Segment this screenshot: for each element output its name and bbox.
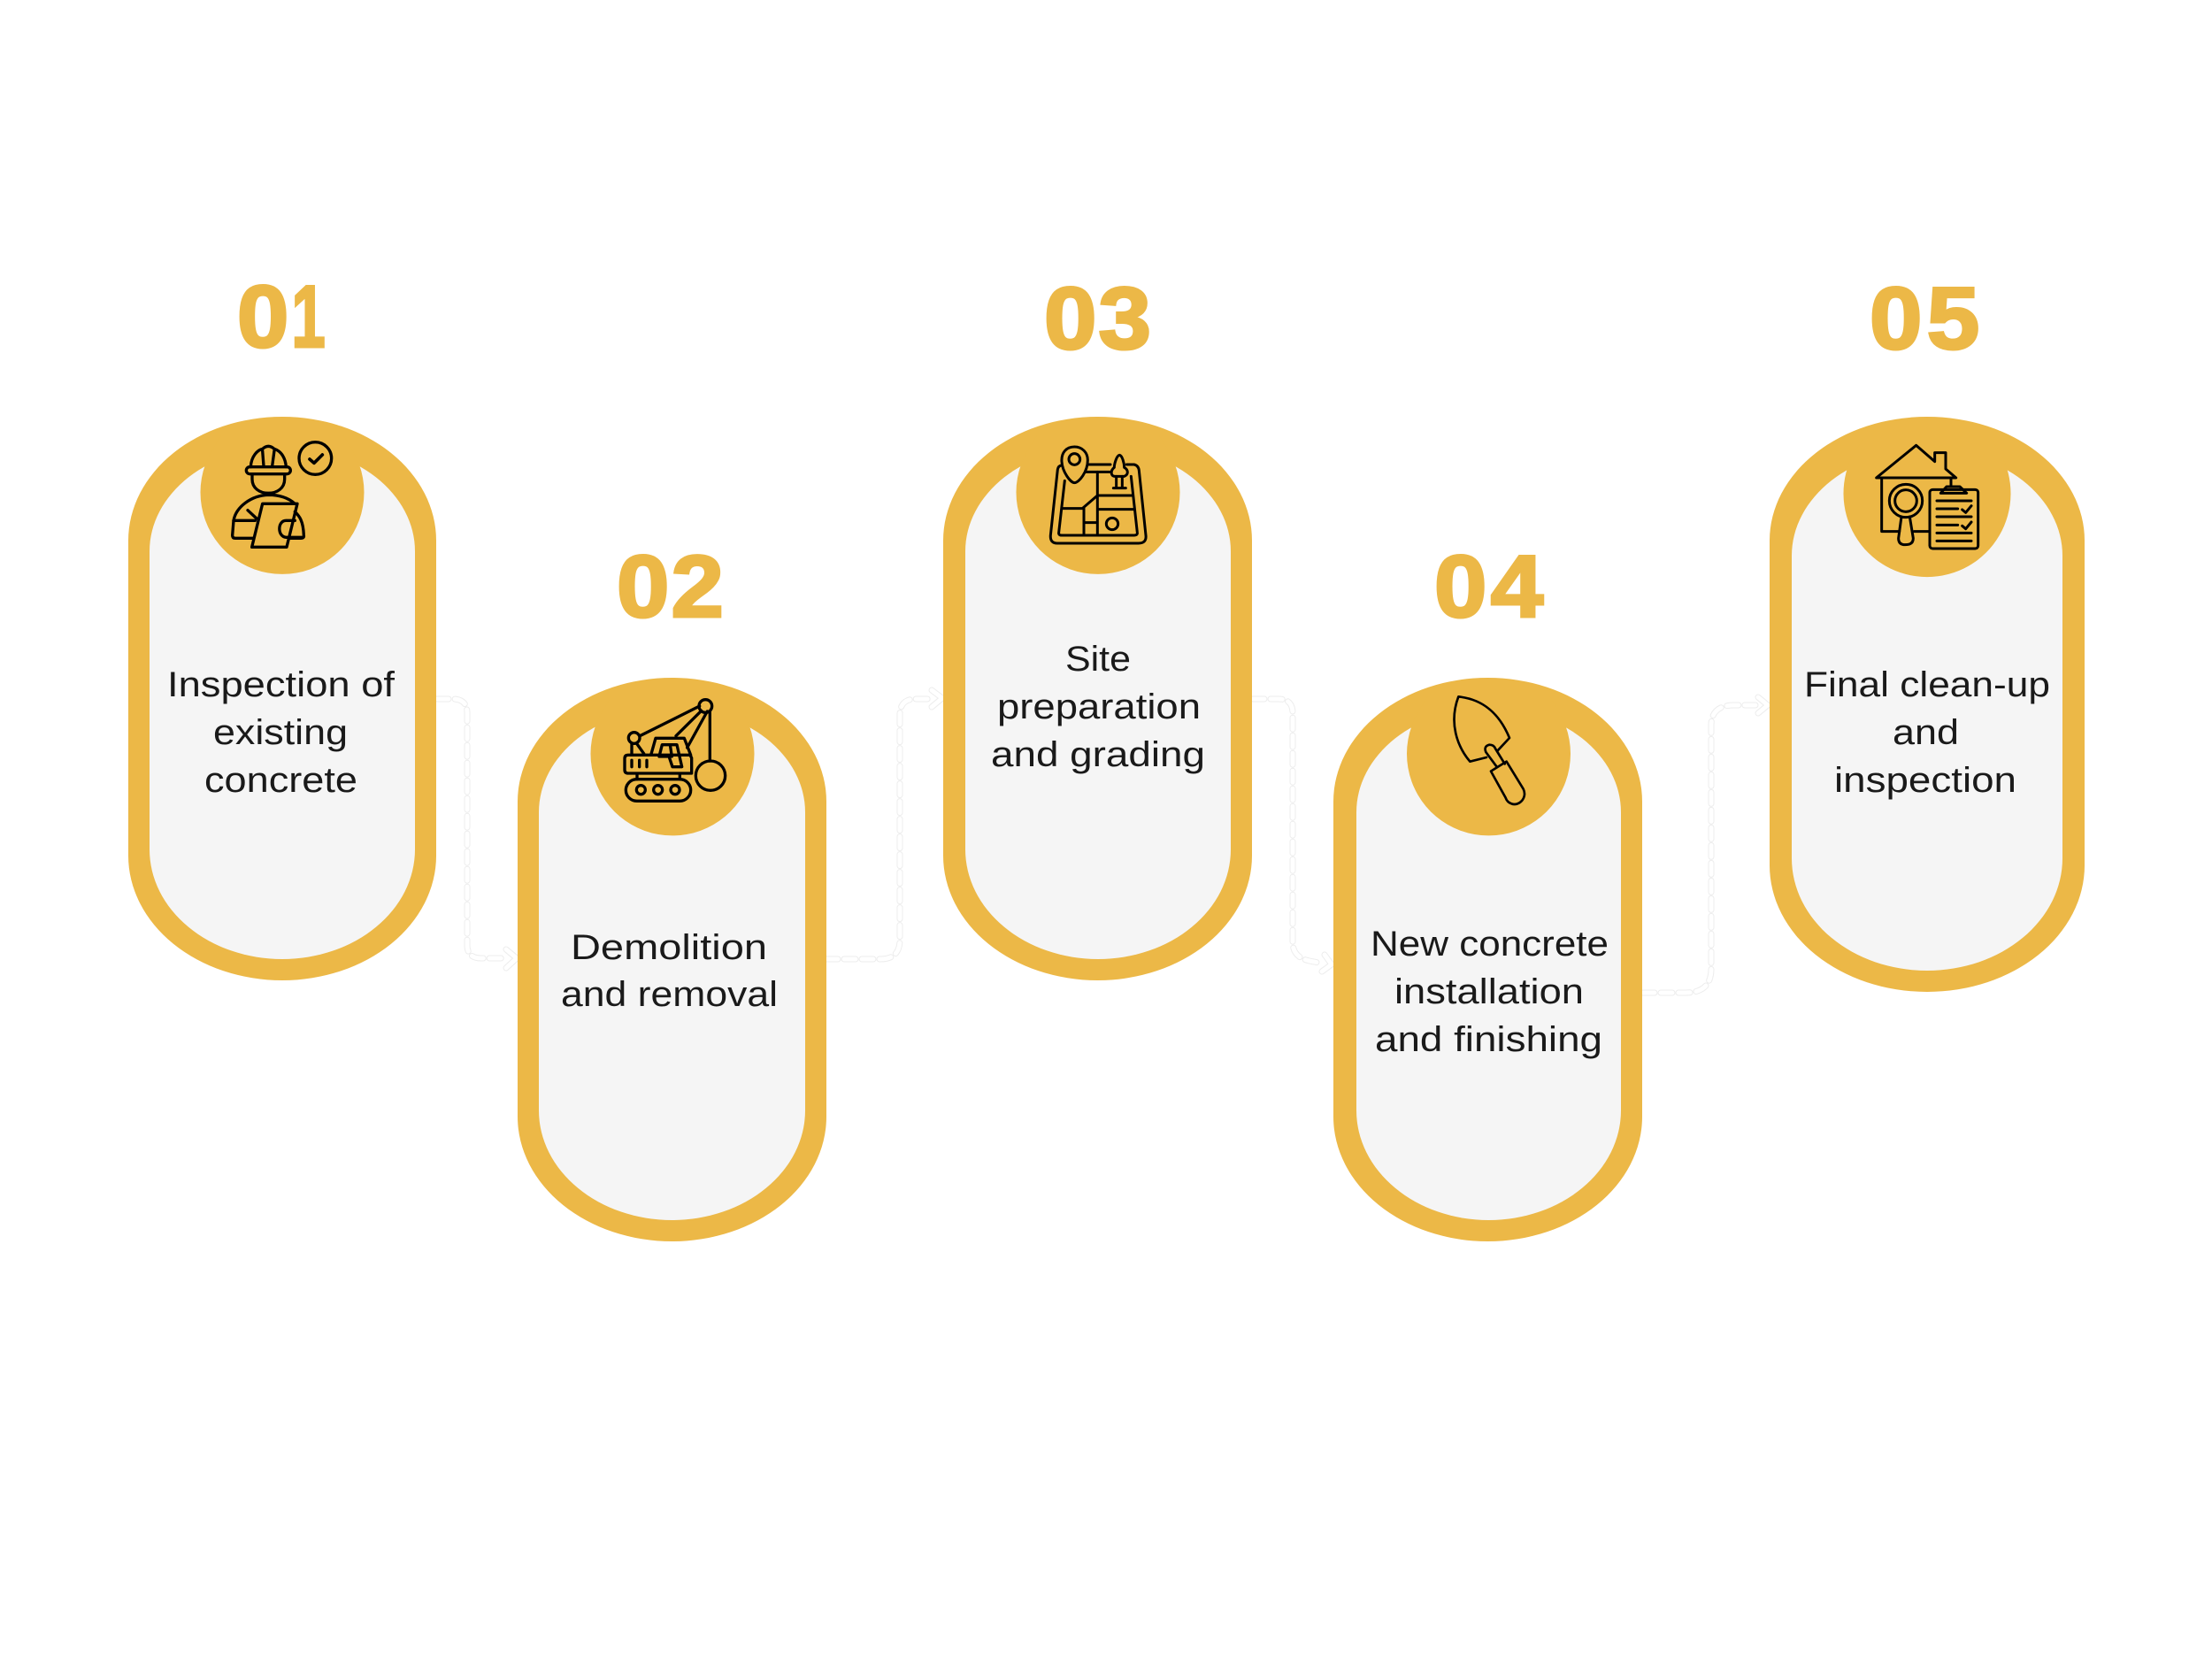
step text xyxy=(167,665,396,800)
step text: preparation xyxy=(997,687,1201,726)
step text: Demolition xyxy=(571,928,767,967)
step number 04: 04 xyxy=(1434,538,1543,635)
step text xyxy=(1804,665,2050,800)
step text: Inspection of xyxy=(167,665,396,704)
icon: trowel xyxy=(1455,696,1525,804)
step text: and xyxy=(1893,713,1959,752)
step text: and removal xyxy=(561,975,778,1014)
step number 05: 05 xyxy=(1870,270,1979,367)
panel: step 1 xyxy=(128,268,436,980)
arrow: step 2 to step 3 xyxy=(826,690,942,959)
icon badge xyxy=(1016,435,1180,574)
step text: and grading xyxy=(991,735,1205,774)
panel: step 3 xyxy=(943,270,1252,980)
step text: existing xyxy=(213,713,348,752)
step number 01: 0 xyxy=(237,268,288,365)
icon: demolition crane xyxy=(625,700,726,801)
step text xyxy=(991,640,1205,774)
icon: inspector with clipboard xyxy=(233,442,332,547)
icon: house inspection checklist xyxy=(1877,445,1978,549)
panel: step 5 xyxy=(1770,270,2085,992)
panel: step 2 xyxy=(518,538,826,1241)
step text: Final clean-up xyxy=(1804,665,2050,704)
pill card xyxy=(943,417,1252,980)
step text xyxy=(561,928,778,1014)
step number 03: 03 xyxy=(1044,270,1151,367)
step number 01: 1 xyxy=(291,268,326,365)
step text: and finishing xyxy=(1375,1020,1602,1059)
step number 02: 02 xyxy=(617,538,724,635)
step text: Site xyxy=(1065,640,1131,679)
pill card xyxy=(518,678,826,1241)
pill card xyxy=(1770,417,2085,992)
icon badge xyxy=(591,696,754,835)
arrow: step 3 to step 4 xyxy=(1253,699,1332,972)
arrow: step 1 to step 2 xyxy=(437,699,517,968)
pill card xyxy=(128,417,436,980)
icon: site plan map xyxy=(1050,447,1146,543)
step text: New concrete xyxy=(1371,925,1609,964)
icon badge xyxy=(201,435,365,574)
icon badge xyxy=(1407,696,1571,835)
icon badge xyxy=(1844,437,2010,577)
step text: concrete xyxy=(204,761,357,800)
step text: inspection xyxy=(1834,761,2016,800)
pill card xyxy=(1333,678,1642,1241)
step text xyxy=(1371,925,1609,1059)
panel: step 4 xyxy=(1333,538,1642,1241)
step text: installation xyxy=(1394,972,1584,1011)
arrow: step 4 to step 5 xyxy=(1643,697,1768,993)
